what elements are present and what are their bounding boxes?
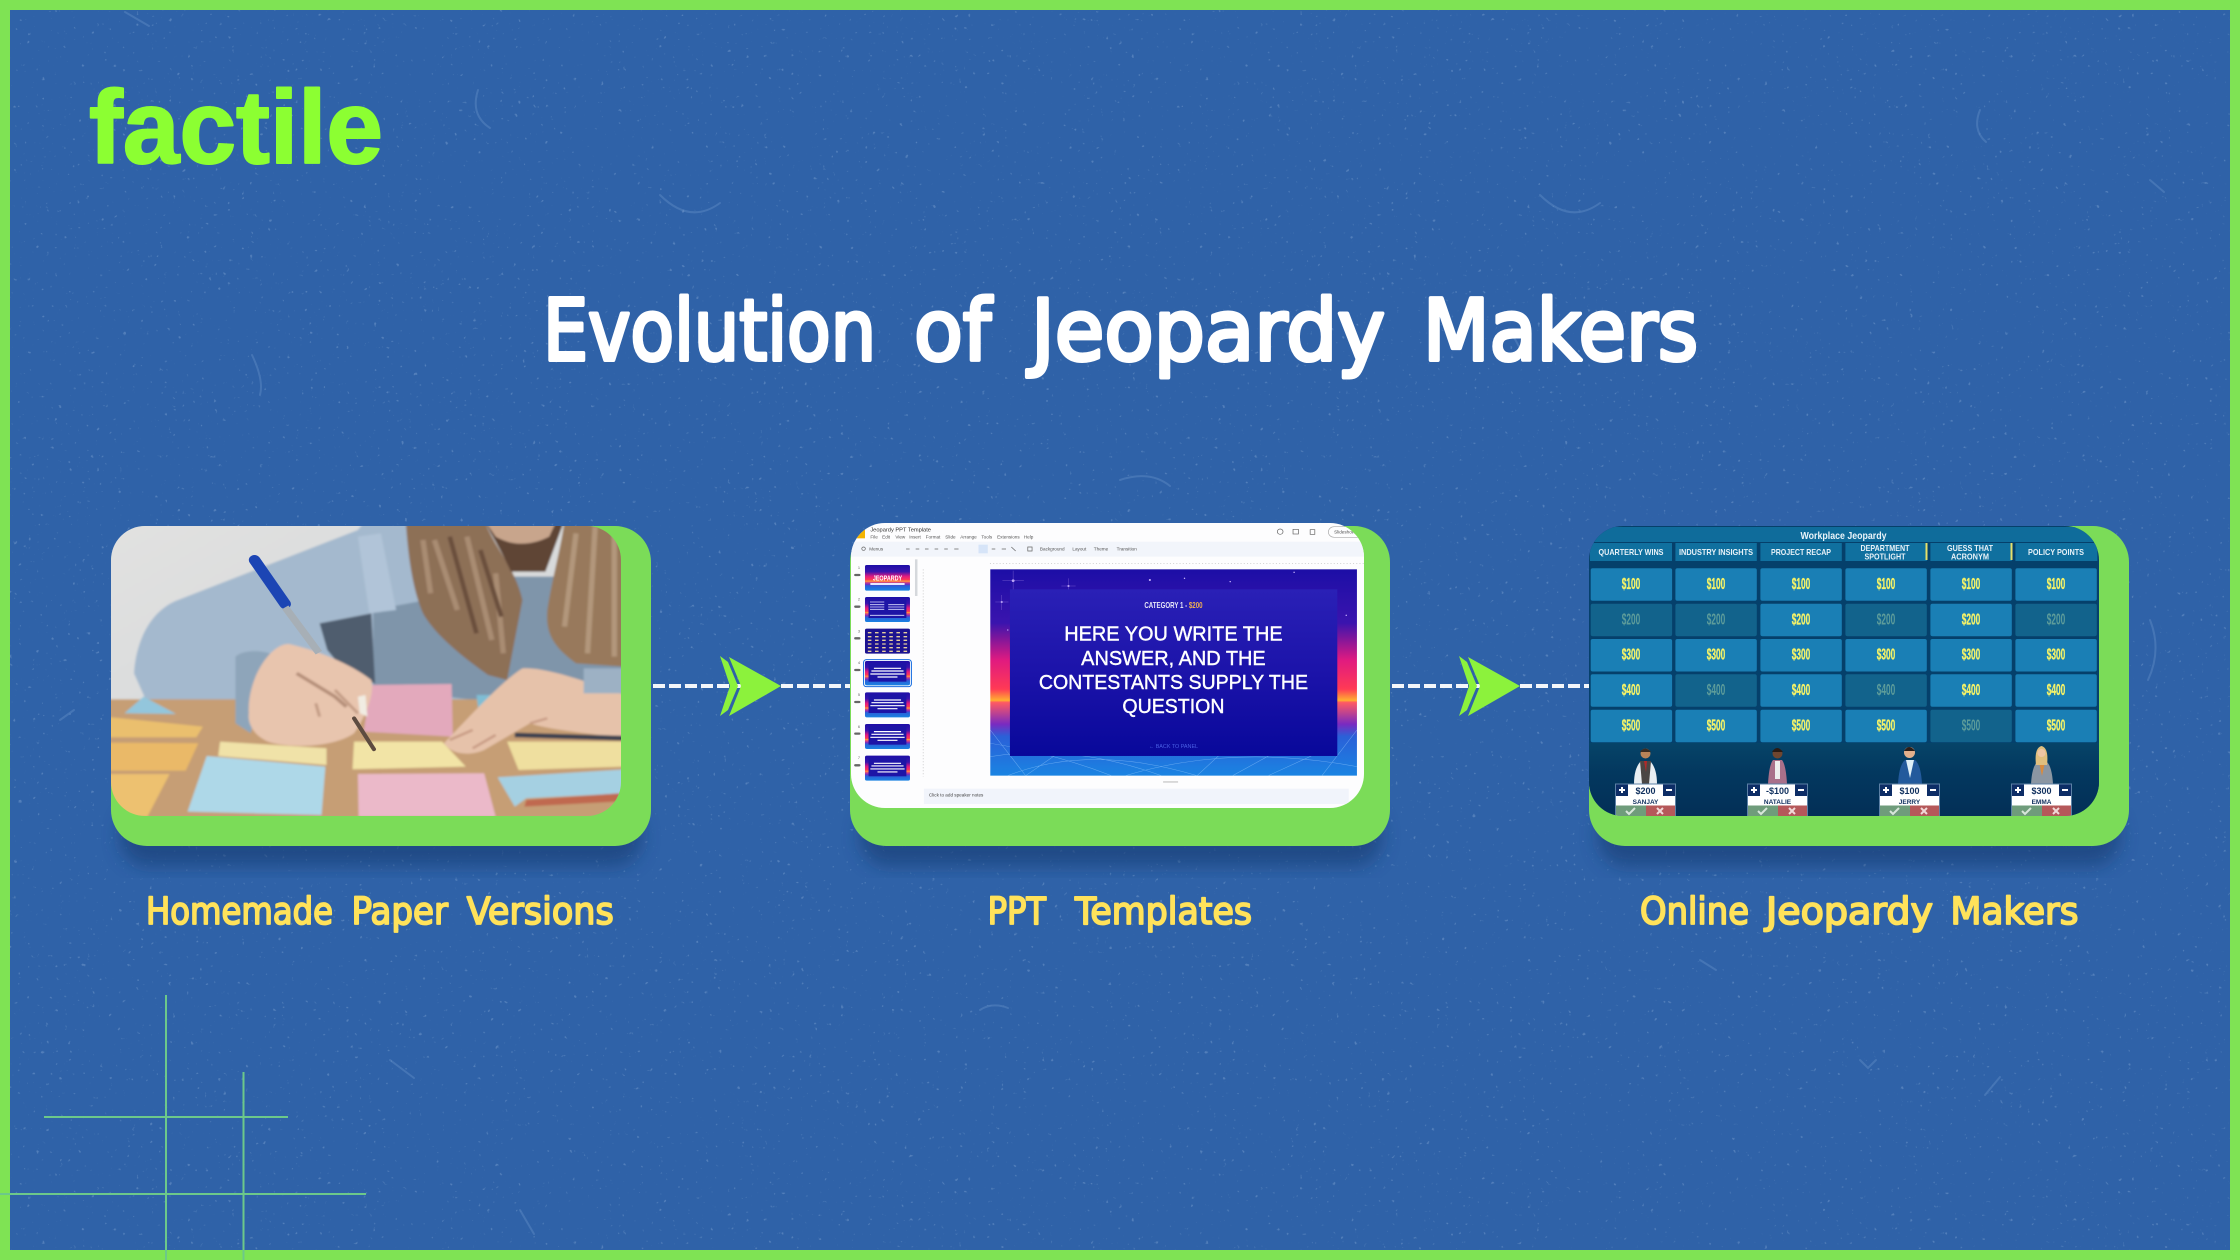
stars [1001,572,1347,631]
category headers: PROJECT RECAP [1771,547,1831,557]
board title: Workplace Jeopardy [1800,531,1887,542]
category headers: QUARTERLY WINS [1598,547,1664,557]
contestant: Natalie: -$100 [1766,786,1789,796]
menu bar: Tools [981,535,993,540]
slide thumbnails: 2 [858,598,860,602]
slide thumbnails: 5 [858,693,860,697]
contestant: Sanjay: $200 [1635,786,1656,796]
contestant: Jerry: $100 [1899,786,1920,796]
$400 row: $400 [1962,682,1980,699]
question text [1039,622,1308,718]
contestant: Emma: $300 [2031,786,2052,796]
category headers: INDUSTRY INSIGHTS [1679,547,1753,557]
category headers: DEPARTMENT [1860,543,1910,553]
menu bar: Format [926,535,941,540]
$200 row [1591,604,2097,636]
menu bar: Insert [909,535,922,540]
$300 row: $300 [2047,647,2065,664]
toolbar: Theme [1094,547,1109,552]
menu bar: Help [1024,535,1034,540]
slide thumbnails [855,565,911,781]
stage grid [990,730,1357,776]
caption: homemade paper versions: Paper [352,890,449,933]
panel: PPT templates [847,520,1390,866]
$400 row: $400 [1707,682,1725,699]
$300 row: $300 [1962,647,1980,664]
back link: ← BACK TO PANEL [1149,744,1199,750]
title: Makers [1423,282,1698,381]
$400 row [1591,674,2097,707]
ruler [990,563,1364,564]
$100 row: $100 [1962,576,1980,593]
category label: CATEGORY 1 - $200 [1144,600,1203,610]
panel: homemade paper versions [105,520,651,866]
menu bar: Edit [882,535,891,540]
connector arrow 2 [1392,656,1590,716]
$500 row: $500 [1622,717,1640,734]
contestant: Jerry: JERRY [1899,799,1921,806]
caption: PPT templates: Templates [1074,890,1252,933]
caption: homemade paper versions: Homemade [146,890,333,933]
question text: CONTESTANTS SUPPLY THE [1039,671,1308,694]
question panel [1010,589,1337,756]
title: of [914,282,993,381]
caption: online jeopardy makers: Makers [1950,890,2078,933]
caption: PPT templates: PPT [988,890,1046,933]
$300 row: $300 [1622,647,1640,664]
slide thumbnails: 6 [858,725,860,729]
question text: QUESTION [1122,695,1224,718]
$200 row: $200 [1792,611,1810,628]
contestant: Natalie [1748,748,1808,816]
$400 row: $400 [1877,682,1895,699]
panel: online jeopardy makers [1589,526,2129,866]
$100 row: $100 [2047,576,2065,593]
caption: homemade paper versions: Versions [467,890,614,933]
$200 row: $200 [1877,611,1895,628]
menu bar: Slide [945,535,956,540]
toolbar: Slideshow [1334,529,1356,534]
$500 row: $500 [1877,717,1895,734]
pen [255,560,374,749]
slide thumbnails: 4 [858,661,860,665]
decorative grid lines [0,995,366,1260]
menu bar [870,535,1034,540]
$500 row: $500 [1707,717,1725,734]
contestant: Sanjay [1616,748,1676,816]
$400 row: $400 [1792,682,1810,699]
$100 row: $100 [1707,576,1725,593]
caption: online jeopardy makers: Online [1640,890,1749,933]
contestant: Sanjay: SANJAY [1633,799,1659,806]
$300 row: $300 [1792,647,1810,664]
green card 2 [850,526,1390,846]
$200 row: $200 [1622,611,1640,628]
$500 row: $500 [1962,717,1980,734]
slide thumbnails: 1 [858,566,860,570]
slide thumbnails: 7 [858,756,860,760]
screenshot: slide editor [847,520,1372,813]
speaker notes: Click to add speaker notes [929,793,984,798]
logo: factile: factile [89,70,383,186]
title: Jeopardy [1026,282,1385,381]
contestant stage [1589,759,2099,816]
$200 row: $200 [2047,611,2065,628]
title: Evolution [543,282,876,381]
$100 row: $100 [1877,576,1895,593]
speaker notes [924,782,1349,804]
toolbar [869,529,1356,552]
category headers [1590,543,2097,562]
$400 row: $400 [2047,682,2065,699]
category headers: SPOTLIGHT [1864,552,1906,562]
slide thumbnails: JEOPARDY [873,574,902,583]
$100 row: $100 [1792,576,1810,593]
$200 row: $200 [1707,611,1725,628]
$400 row: $400 [1622,682,1640,699]
$500 row: $500 [2047,717,2065,734]
category headers: POLICY POINTS [2028,547,2084,557]
menu bar: Arrange [960,535,977,540]
$300 row: $300 [1877,647,1895,664]
$200 row: $200 [1962,611,1980,628]
green card 1 [111,526,651,846]
caption: online jeopardy makers: Jeopardy [1764,890,1933,933]
contestant: Emma: EMMA [2032,799,2052,806]
document title: Jeopardy PPT Template [870,528,931,534]
contestant: Jerry [1880,747,1940,816]
$500 row [1591,710,2097,742]
contestant: Natalie: NATALIE [1764,799,1792,806]
$300 row [1591,639,2097,672]
question text: ANSWER, AND THE [1081,647,1266,670]
$100 row: $100 [1622,576,1640,593]
menu bar: File [870,535,878,540]
toolbar: Transition [1117,547,1137,552]
menu bar: Extensions [997,535,1020,540]
screenshot: jeopardy game board [1589,526,2099,816]
connector arrow 1 [653,656,850,716]
main slide [990,569,1357,776]
contestant: Emma [2012,746,2072,816]
toolbar: Background [1040,547,1065,552]
category headers: GUESS THAT [1947,543,1994,553]
slide thumbnails: 3 [858,629,860,633]
category headers: ACRONYM [1951,552,1989,562]
photo: person writing on sticky notes [105,520,630,820]
toolbar: Layout [1072,547,1087,552]
$300 row: $300 [1707,647,1725,664]
green card 3 [1589,526,2129,846]
toolbar: Menus [869,547,884,552]
$500 row: $500 [1792,717,1810,734]
menu bar: View [895,535,906,540]
$100 row [1591,568,2097,601]
question text: HERE YOU WRITE THE [1064,622,1283,645]
